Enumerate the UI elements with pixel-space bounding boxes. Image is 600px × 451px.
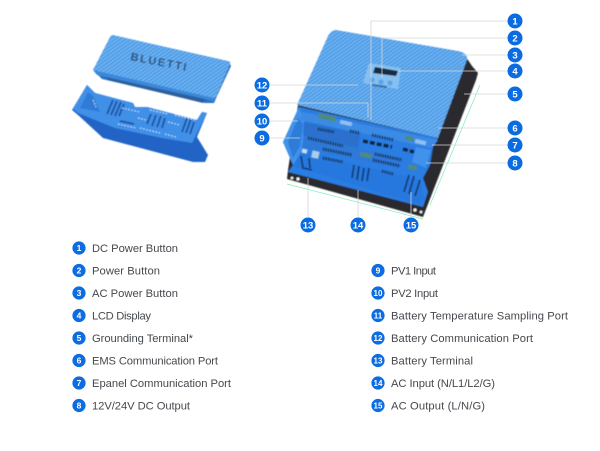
callout 9: 9 <box>259 134 265 144</box>
callout 7: 7 <box>512 140 518 152</box>
green connectors <box>318 113 417 171</box>
item 1: 1 <box>77 243 82 253</box>
item 14: AC Input (N/L1/L2/G) <box>391 378 495 390</box>
item 4 <box>72 309 151 322</box>
callout 15: 15 <box>406 220 417 232</box>
item 5: Grounding Terminal* <box>92 333 194 345</box>
callout 3: 3 <box>512 50 518 62</box>
callout 4: 4 <box>512 66 518 78</box>
item 7: Epanel Communication Port <box>92 378 232 390</box>
callout 12 <box>254 78 270 92</box>
callout 2: 2 <box>512 34 518 44</box>
item 10: PV2 Input <box>391 288 439 300</box>
item 5: 5 <box>77 333 82 343</box>
callout 7 <box>508 138 522 152</box>
item 11: 11 <box>374 312 383 320</box>
logo: BLUETTI <box>129 51 189 74</box>
legend: left column <box>72 241 232 412</box>
callout 9 <box>254 130 270 146</box>
top cover <box>93 35 231 103</box>
callout 1: 1 <box>512 16 518 28</box>
callout 11 <box>254 96 270 110</box>
legend: right column <box>371 264 569 412</box>
item 9: 9 <box>376 266 381 276</box>
item 9: PV1 Input <box>391 266 437 278</box>
item 9 <box>371 264 437 278</box>
callout 2 <box>508 30 522 46</box>
item 8: 12V/24V DC Output <box>92 400 191 412</box>
item 2: Power Button <box>92 266 160 278</box>
callout 5 <box>508 86 522 102</box>
item 8: 8 <box>77 400 82 410</box>
callout 6 <box>508 120 522 136</box>
callout 3 <box>508 48 522 62</box>
plate mounting holes <box>291 177 422 213</box>
item 2 <box>72 264 160 278</box>
lower wiring <box>301 156 420 196</box>
callout badges on the diagram <box>254 14 522 232</box>
callout 13: 13 <box>303 220 313 232</box>
item 6: EMS Communication Port <box>92 356 219 368</box>
callout 1 <box>508 14 522 28</box>
terminal rows <box>308 129 402 174</box>
blue open chassis <box>283 107 438 207</box>
callout 15 <box>404 218 418 232</box>
callout 5: 5 <box>512 90 518 100</box>
item 10 <box>371 286 439 300</box>
item 13: Battery Terminal <box>391 356 473 368</box>
item 15: 15 <box>374 402 383 410</box>
callout 8 <box>508 156 522 170</box>
item 6: 6 <box>77 356 82 366</box>
callout 6: 6 <box>512 124 518 134</box>
rear black plate and side <box>287 54 478 217</box>
LCD panel <box>363 63 401 89</box>
item 14: 14 <box>374 379 383 388</box>
item 12: 12 <box>374 334 383 343</box>
callout 14 <box>350 218 366 232</box>
callout 4 <box>508 64 522 78</box>
callout 12: 12 <box>257 80 267 92</box>
leader lines <box>270 21 508 217</box>
callout 14: 14 <box>353 220 364 232</box>
top striped face <box>297 30 467 138</box>
callout 10 <box>254 114 270 128</box>
item 15: AC Output (L/N/G) <box>391 400 485 412</box>
item 3: AC Power Button <box>92 288 178 300</box>
item 11: Battery Temperature Sampling Port <box>391 310 569 322</box>
item 12: Battery Communication Port <box>391 333 534 345</box>
main inverter unit <box>283 30 478 217</box>
item 10: 10 <box>374 289 383 298</box>
item 4: 4 <box>77 310 82 320</box>
item 4: LCD Display <box>92 310 151 322</box>
item 3: 3 <box>77 288 82 298</box>
dimension lines <box>287 85 480 219</box>
item 13: 13 <box>374 356 383 366</box>
item 7: 7 <box>77 378 82 388</box>
callout 11: 11 <box>257 98 268 110</box>
exploded view: top cover and lower housing <box>72 35 231 162</box>
item 2: 2 <box>77 266 82 276</box>
callout 10: 10 <box>257 116 267 128</box>
callout 8: 8 <box>512 158 518 170</box>
light port blocks <box>340 120 426 145</box>
item 1: DC Power Button <box>92 243 178 255</box>
lower housing <box>72 85 208 162</box>
callout 13 <box>300 218 316 232</box>
